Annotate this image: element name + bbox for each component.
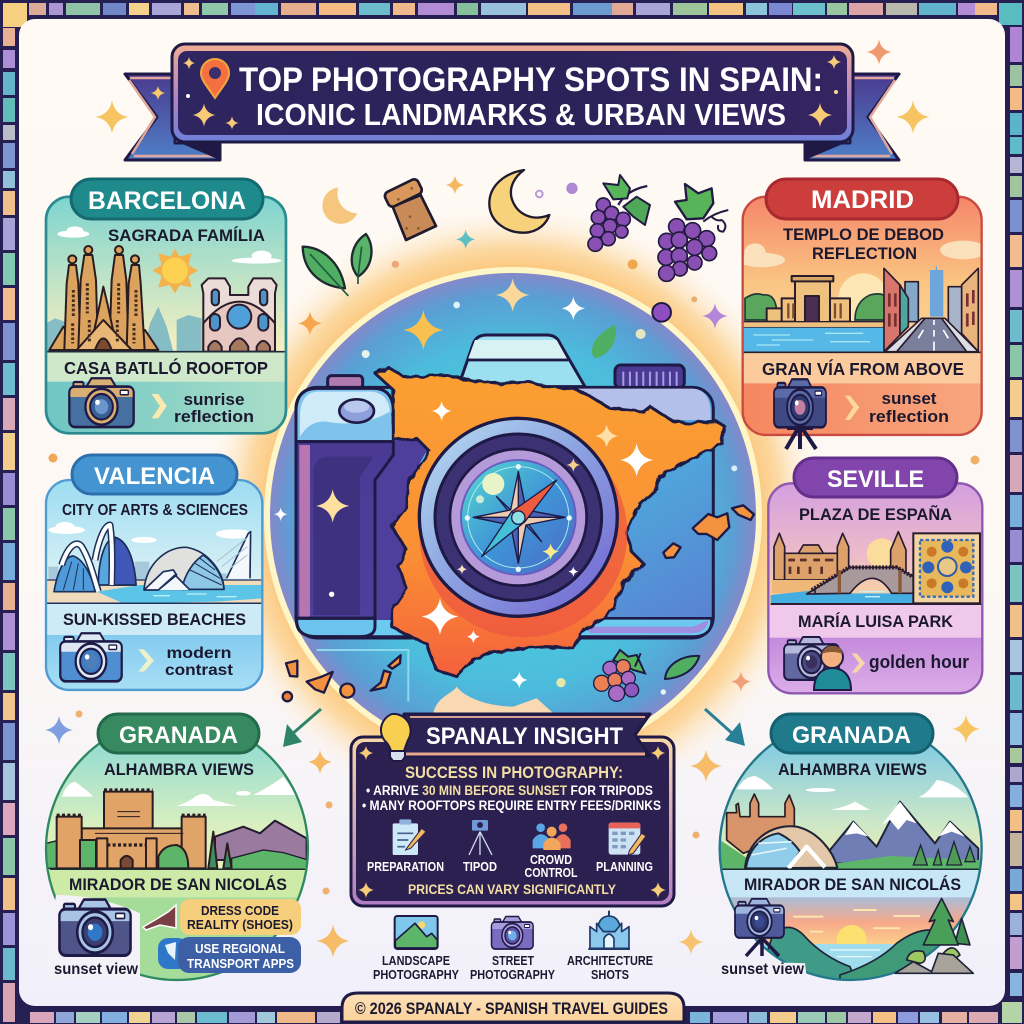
Seville text: MARÍA LUISA PARK [798, 612, 953, 631]
insight text: SUCCESS IN PHOTOGRAPHY: [405, 763, 623, 782]
icon: leaves [303, 234, 371, 296]
compass lens [419, 418, 617, 616]
reflection water [743, 328, 884, 353]
icon: Granada right camera on tripod [735, 899, 784, 956]
arrow left [283, 709, 321, 747]
insight text: CROWD [530, 853, 572, 867]
icon: street camera [492, 916, 533, 949]
chevron [152, 394, 167, 418]
tip: dress code [180, 899, 301, 935]
Granada left pill heading: GRANADA [119, 722, 238, 749]
purple ball [652, 303, 671, 322]
plaza ground and water [772, 580, 828, 594]
decorative food icons above the hub [303, 170, 728, 302]
Granada left text: MIRADOR DE SAN NICOLÁS [69, 875, 287, 894]
Balearic and Canary islands [283, 505, 754, 701]
Madrid text: TEMPLO DE DEBOD [783, 225, 944, 244]
icon: large grapes [658, 184, 728, 281]
sun [838, 273, 884, 321]
category icons [373, 911, 653, 982]
Granada right text: MIRADOR DE SAN NICOLÁS [744, 875, 961, 894]
Alhambra fortress [57, 790, 232, 868]
central glow [203, 204, 823, 824]
arrow right [705, 709, 745, 746]
chevron [845, 396, 859, 420]
insight ribbon: SPANALY INSIGHT [426, 723, 623, 750]
icon: transport app [158, 938, 188, 969]
camera button [328, 376, 363, 389]
icon: Madrid camera on tripod [774, 379, 826, 449]
sparkles around lower section [45, 454, 980, 958]
Seville text [798, 504, 969, 672]
pines and rocks [895, 898, 973, 973]
Valencia text: SUN-KISSED BEACHES [63, 611, 246, 629]
Temple of Debod [767, 276, 850, 327]
mountains [830, 802, 978, 863]
tip: transport apps: USE REGIONAL [195, 941, 285, 956]
dome [745, 826, 837, 868]
chevron [138, 649, 154, 672]
Plaza de Espana palace [774, 532, 906, 582]
Valencia text [62, 502, 248, 679]
tip: transport apps: TRANSPORT APPS [187, 956, 294, 971]
tip: dress code: DRESS CODE [201, 903, 279, 918]
Spain map [375, 367, 725, 677]
tip: transport apps [178, 937, 301, 973]
insight text: TIPOD [463, 860, 497, 874]
camera viewfinder [458, 335, 585, 387]
clouds [737, 776, 968, 810]
insight text: PLANNING [596, 860, 653, 874]
category labels: PHOTOGRAPHY [470, 967, 555, 982]
Granada right text: sunset view [721, 961, 805, 978]
insight text [362, 763, 661, 897]
footer: © 2026 SPANALY - SPANISH TRAVEL GUIDES [355, 999, 668, 1018]
Granada right text [721, 761, 961, 978]
Valencia text: CITY OF ARTS & SCIENCES [62, 502, 248, 519]
insight text: • ARRIVE 30 MIN BEFORE SUNSET FOR TRIPODS [366, 783, 653, 798]
Granada right pill heading: GRANADA [792, 722, 911, 749]
camera grip [296, 388, 433, 637]
leaf lower right [665, 656, 699, 679]
category labels: SHOTS [591, 967, 629, 982]
icon: Valencia camera [60, 633, 122, 681]
panel: Madrid [45, 179, 987, 1022]
Granada left text: ALHAMBRA VIEWS [104, 761, 254, 779]
city skyline [46, 307, 202, 352]
tip: dress code: REALITY (SHOES) [187, 917, 293, 932]
Seville pill heading [794, 458, 957, 497]
icon: tripod [469, 820, 492, 855]
icon: map pin [201, 59, 229, 98]
trees [913, 842, 975, 865]
icon: crescent moon [489, 170, 549, 233]
sails science museum [54, 525, 251, 592]
Barcelona text [64, 226, 268, 426]
Madrid text: sunset [882, 390, 937, 408]
sun [152, 248, 198, 293]
category labels [373, 953, 653, 982]
Barcelona text: reflection [174, 408, 254, 426]
insight text: PRICES CAN VARY SIGNIFICANTLY [408, 882, 616, 897]
category labels: PHOTOGRAPHY [373, 967, 459, 982]
Barcelona pill heading [71, 179, 263, 219]
icon: shoe [143, 905, 176, 930]
sun [866, 538, 892, 566]
Gran Via buildings [884, 265, 978, 352]
insight ribbon [404, 714, 650, 756]
panel: Granada right [45, 454, 982, 1022]
Seville text: PLAZA DE ESPAÑA [799, 504, 952, 524]
icon: landscape [395, 916, 438, 949]
panel: Granada left [45, 454, 982, 1022]
Madrid text: GRAN VÍA FROM ABOVE [762, 358, 964, 379]
castle [727, 794, 794, 853]
Barcelona text: SAGRADA FAMÍLIA [108, 226, 265, 245]
Barcelona text: sunrise [184, 391, 244, 409]
Seville pill heading: SEVILLE [827, 466, 924, 493]
Barcelona pill heading: BARCELONA [88, 187, 246, 215]
azulejo tile [913, 533, 980, 603]
central hub circle with camera and Spain map [267, 270, 759, 762]
clouds and skyline [48, 522, 252, 543]
Madrid text: reflection [869, 408, 949, 426]
icon: people [533, 823, 571, 850]
Sagrada Familia [49, 246, 158, 350]
Casa Batllo facade [202, 278, 277, 352]
Barcelona text: CASA BATLLÓ ROOFTOP [64, 357, 268, 378]
Seville text: golden hour [869, 652, 969, 672]
title sparkles [183, 55, 841, 130]
icon: small grapes [588, 175, 650, 251]
Valencia text: contrast [165, 662, 234, 679]
category labels: ARCHITECTURE [567, 953, 653, 968]
Madrid text: REFLECTION [812, 244, 917, 263]
icon: Granada left camera [59, 900, 131, 955]
icon: clipboard [393, 819, 426, 855]
africa landmass [433, 687, 553, 713]
label strip [46, 352, 286, 382]
bushes [745, 294, 887, 320]
footer [342, 993, 684, 1022]
title text: TOP PHOTOGRAPHY SPOTS IN SPAIN: [239, 61, 823, 99]
canaries inset line [317, 650, 408, 702]
category labels: LANDSCAPE [382, 953, 450, 968]
bridge [807, 567, 913, 594]
star right of title [896, 100, 930, 134]
icon: teal star [456, 230, 475, 249]
Granada right text: ALHAMBRA VIEWS [778, 761, 927, 779]
sky sparkles [274, 278, 751, 695]
title text: ICONIC LANDMARKS & URBAN VIEWS [256, 97, 786, 132]
panel: Seville [45, 454, 982, 1022]
category labels: STREET [492, 953, 534, 968]
icon: calendar [609, 823, 646, 855]
sunset [836, 925, 866, 944]
title banner [125, 44, 899, 160]
icon: cork [383, 178, 436, 240]
Granada left text [54, 761, 287, 978]
compass star [473, 472, 565, 563]
icon: gold star [446, 176, 464, 194]
panel: Barcelona [45, 179, 987, 1022]
icon: Barcelona camera [69, 378, 134, 427]
Granada left text: sunset view [54, 961, 139, 978]
clouds [57, 226, 282, 264]
ribbon tails [125, 74, 899, 160]
clouds [62, 777, 297, 806]
star left of title [96, 100, 128, 134]
sunset view white blob [690, 960, 807, 977]
chevron [852, 653, 865, 673]
icon: architecture [588, 911, 630, 949]
Valencia text: modern [166, 645, 232, 662]
star top right [866, 40, 892, 64]
title text [239, 61, 823, 132]
insight text: PREPARATION [367, 860, 444, 874]
Madrid pill heading: MADRID [811, 186, 914, 214]
icon: faded moon [322, 187, 357, 224]
Madrid text [762, 225, 964, 426]
insight text: CONTROL [524, 866, 578, 880]
leaf in circle [592, 325, 616, 358]
camera body [296, 387, 713, 638]
Valencia pill heading: VALENCIA [94, 463, 215, 490]
icon: Seville camera and person [784, 637, 851, 690]
mountains [215, 821, 307, 860]
Madrid pill heading [766, 179, 958, 219]
icon: light bulb [381, 714, 411, 761]
purple dots [392, 183, 697, 302]
Granada right pill heading [771, 714, 933, 753]
panel: Spanaly Insight [351, 714, 674, 906]
insight text: • MANY ROOFTOPS REQUIRE ENTRY FEES/DRINKS [362, 798, 661, 813]
camera dial [615, 365, 684, 388]
sunset view white blob [45, 895, 140, 980]
clouds [738, 241, 987, 267]
insight sparkles [358, 746, 666, 898]
berries [594, 650, 645, 701]
Valencia pill heading [72, 455, 237, 494]
panel: Valencia [45, 454, 982, 1022]
Granada left pill heading [98, 714, 259, 753]
pool [46, 580, 262, 604]
